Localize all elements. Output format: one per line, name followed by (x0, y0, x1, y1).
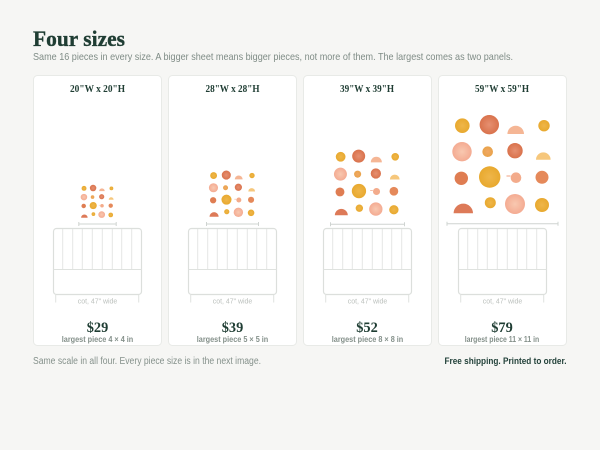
wall decal dots (209, 170, 255, 217)
title: Four sizes (33, 26, 125, 51)
width dimension line (447, 222, 558, 226)
wall decal dots (81, 185, 114, 218)
cot label: cot, 47" wide (483, 296, 522, 306)
cot label: cot, 47" wide (78, 296, 117, 306)
largest piece note: largest piece 5 × 5 in (197, 334, 268, 344)
wall decal dots (334, 150, 400, 216)
panel: 59 inch size (438, 76, 566, 346)
cot outline (324, 228, 412, 302)
price: $29 (87, 320, 108, 336)
price: $52 (356, 320, 378, 336)
width dimension line (206, 222, 258, 226)
panel: 28 inch size (168, 76, 296, 346)
size heading: 28"W x 28"H (206, 83, 260, 95)
size heading: 39"W x 39"H (340, 83, 394, 95)
panel: 20 inch size (34, 76, 162, 346)
size heading: 20"W x 20"H (70, 83, 125, 95)
cot outline (458, 228, 546, 302)
footnote: Same scale in all four. Every piece size is in the next image. (33, 356, 261, 367)
width dimension line (79, 222, 116, 226)
largest piece note: largest piece 11 × 11 in (465, 334, 539, 344)
cot outline (54, 228, 142, 302)
largest piece note: largest piece 8 × 8 in (332, 334, 403, 344)
largest piece note: largest piece 4 × 4 in (62, 334, 133, 344)
width dimension line (330, 222, 404, 226)
size heading: 59"W x 59"H (475, 83, 529, 95)
cot outline (188, 228, 276, 302)
cot label: cot, 47" wide (213, 296, 252, 306)
cot label: cot, 47" wide (348, 296, 387, 306)
shipping note: Free shipping. Printed to order. (444, 356, 566, 367)
panel: 39 inch size (304, 76, 432, 346)
subtitle: Same 16 pieces in every size. A bigger sheet means bigger pieces, not more of them. The largest comes as two panels. (33, 51, 513, 63)
wall decal dots (452, 115, 551, 214)
price: $39 (222, 320, 243, 336)
price: $79 (491, 320, 513, 336)
